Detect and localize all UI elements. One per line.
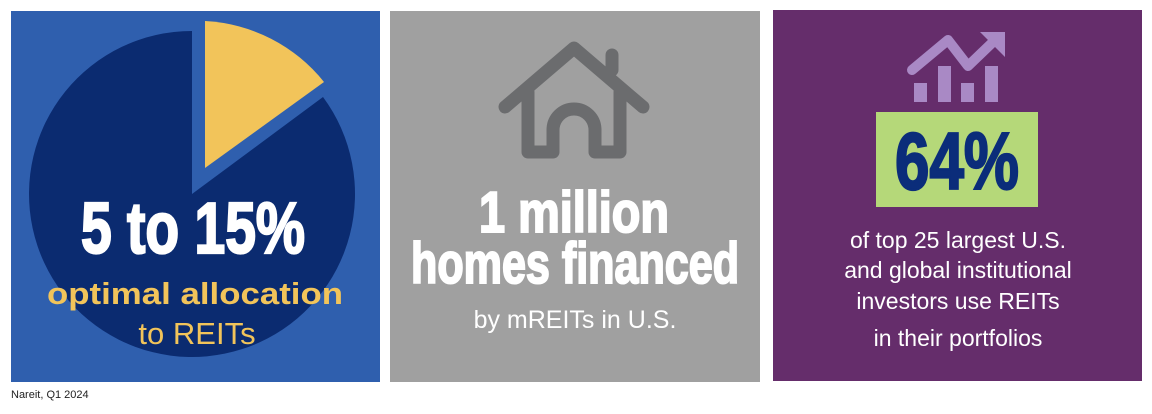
text: description: and global institutional — [844, 257, 1072, 283]
text: by mREITs: by mREITs in U.S. — [474, 306, 676, 334]
panel: investors — [773, 10, 1142, 381]
heading: 1 million: 1 million — [479, 180, 669, 244]
text: description: of top 25 largest U.S. — [850, 227, 1066, 253]
text: to REITs: to REITs — [138, 316, 256, 351]
icon: chart with arrow — [912, 32, 1005, 102]
heading: homes financed: homes financed — [411, 231, 739, 295]
text: description — [844, 227, 1072, 351]
footer: source: Nareit, Q1 2024 — [11, 389, 89, 401]
panel: allocation — [11, 11, 380, 382]
text: optimal allocation: optimal allocation — [47, 276, 343, 311]
heading: 5 to 15%: 5 to 15% — [81, 188, 305, 269]
panel: homes — [390, 11, 760, 382]
text: description: in their portfolios — [874, 325, 1042, 351]
icon: house — [505, 48, 643, 152]
pie chart — [29, 21, 355, 357]
callout: 64%: 64% — [895, 117, 1019, 207]
text: description: investors use REITs — [856, 288, 1060, 314]
